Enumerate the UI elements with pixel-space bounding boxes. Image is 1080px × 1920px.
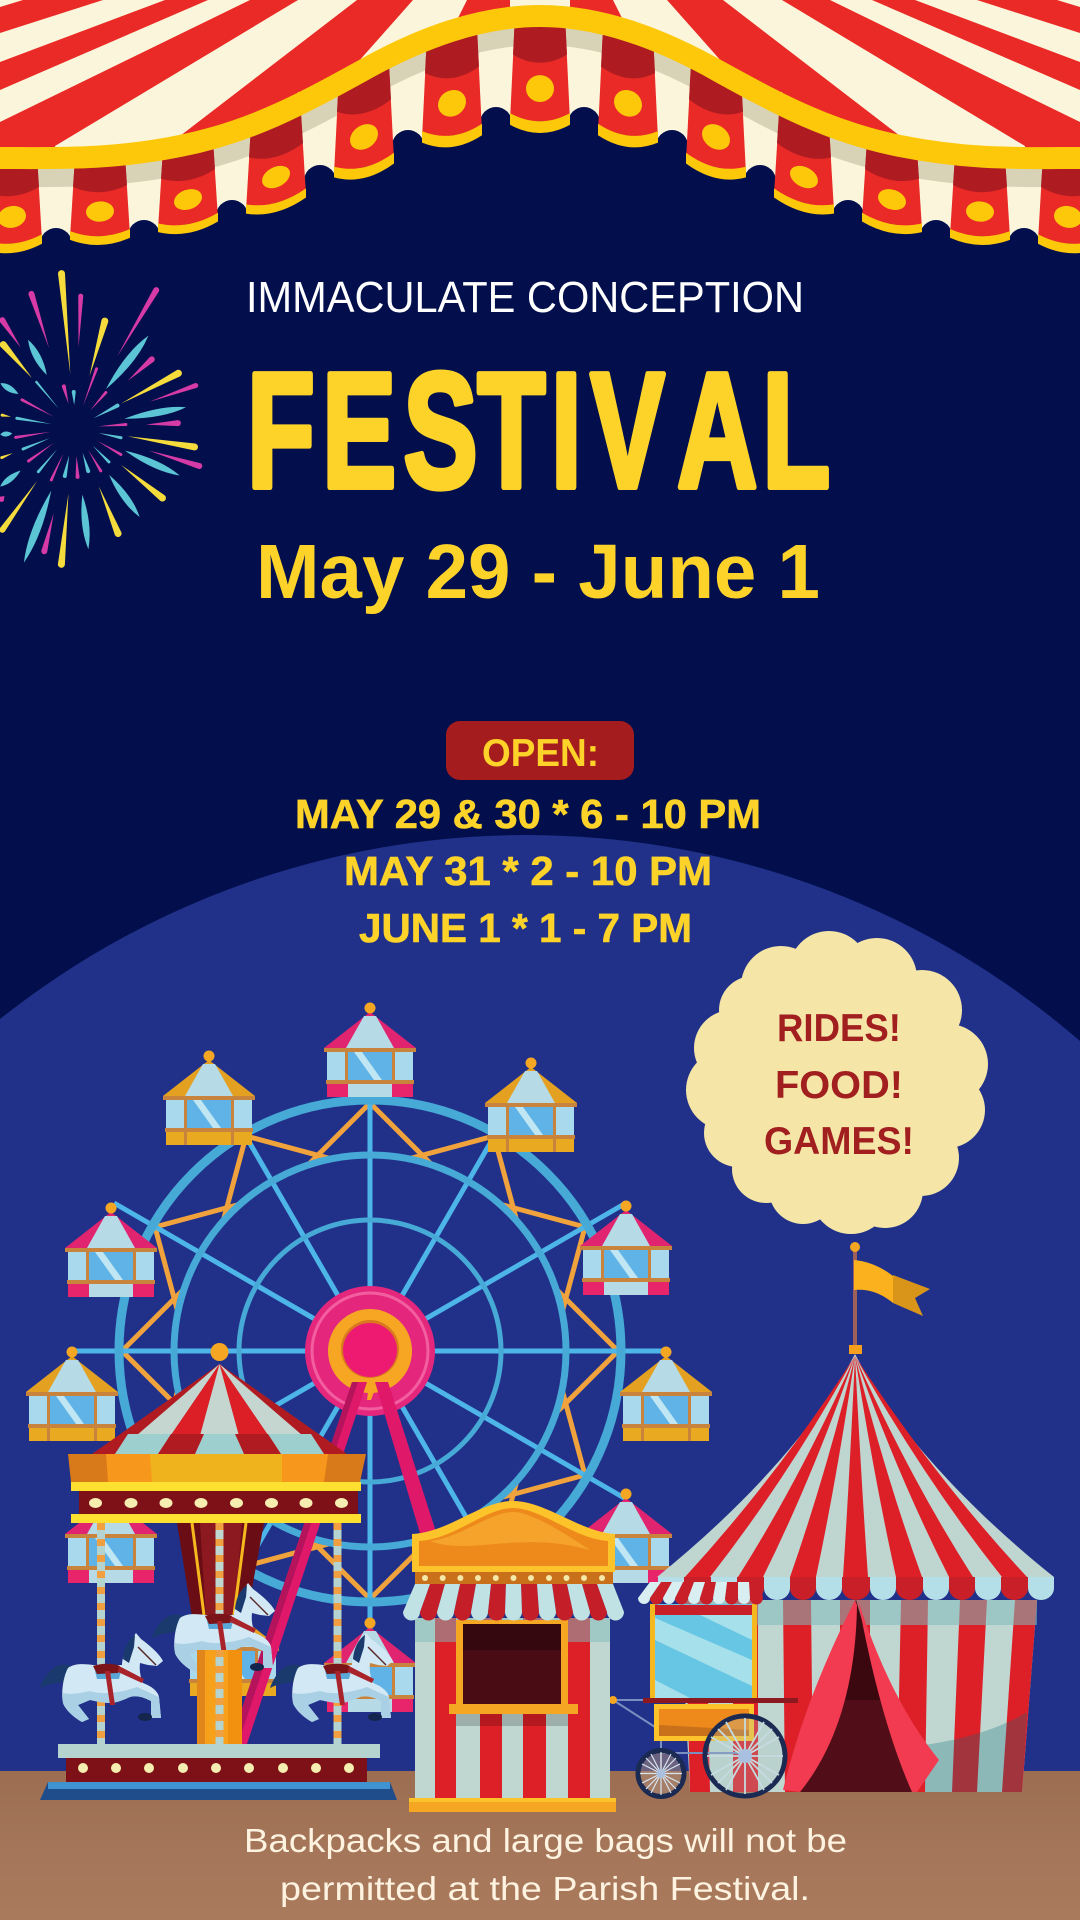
booth body [415, 1618, 610, 1798]
small wheel [638, 1750, 684, 1796]
open badge [446, 721, 634, 780]
booth light strip [415, 1572, 613, 1584]
bag notice: Backpacks and large bags will not be [244, 1822, 847, 1859]
ferris wheel [26, 1002, 712, 1750]
yellow rays [0, 270, 199, 568]
booth window [449, 1620, 578, 1726]
cart box [654, 1704, 754, 1773]
cabins [26, 1002, 712, 1712]
carousel [40, 1343, 397, 1800]
big wheel [705, 1716, 785, 1796]
middle horse [152, 1583, 275, 1672]
callout cloud: GAMES! [764, 1120, 914, 1163]
tent roof [657, 1354, 1054, 1577]
hub [305, 1286, 435, 1416]
circus tent [657, 1242, 1054, 1792]
scallop notches [40, 107, 1040, 298]
opening hours [295, 791, 761, 951]
centre pole upper [216, 1523, 224, 1660]
dates: May 29 - June 1 [256, 529, 820, 615]
opening hours: MAY 31 * 2 - 10 PM [344, 848, 712, 894]
cart window [650, 1604, 757, 1702]
opening hours: MAY 29 & 30 * 6 - 10 PM [295, 791, 761, 837]
orange struts [122, 1103, 618, 1599]
carousel base [40, 1744, 397, 1800]
spokes [74, 1055, 666, 1647]
carousel awning [68, 1454, 366, 1523]
cyan rays [0, 333, 187, 564]
tent door [783, 1600, 939, 1792]
blue dome [0, 835, 1080, 1920]
side horses [40, 1633, 393, 1722]
column [197, 1650, 242, 1744]
rings [119, 1100, 621, 1602]
booth sign [412, 1501, 615, 1572]
cream valance strips [34, 20, 1046, 240]
title: FESTIVAL [247, 338, 830, 522]
opening hours: JUNE 1 * 1 - 7 PM [359, 905, 692, 951]
callout cloud: FOOD! [775, 1064, 903, 1107]
subtitle: IMMACULATE CONCEPTION [246, 273, 804, 322]
bag notice [244, 1822, 847, 1907]
magenta rays [0, 286, 203, 555]
booth awning [403, 1584, 624, 1620]
flag [849, 1242, 930, 1354]
cart awning [638, 1582, 763, 1604]
circus canopy curtain [0, 0, 1080, 298]
canopy stripes [0, 0, 1080, 158]
central cone [177, 1523, 264, 1648]
callout cloud [686, 931, 988, 1234]
open badge: OPEN: [482, 732, 599, 775]
inner disc [174, 1155, 566, 1547]
food cart [609, 1582, 798, 1796]
wheel stand [228, 1382, 436, 1750]
fireworks [0, 270, 203, 568]
ground [0, 1771, 1080, 1920]
rope shadow [0, 30, 1080, 172]
striped poles [101, 1523, 338, 1744]
yellow rope [0, 16, 1080, 158]
roof scallops [658, 1577, 1054, 1600]
carousel roof [92, 1343, 347, 1454]
cart handle [609, 1696, 798, 1727]
red flaps [0, 16, 1080, 256]
tent body [680, 1600, 1037, 1792]
booth base [409, 1798, 616, 1812]
bag notice: permitted at the Parish Festival. [280, 1870, 810, 1907]
ticket booth [403, 1501, 624, 1812]
callout cloud: RIDES! [777, 1007, 901, 1050]
